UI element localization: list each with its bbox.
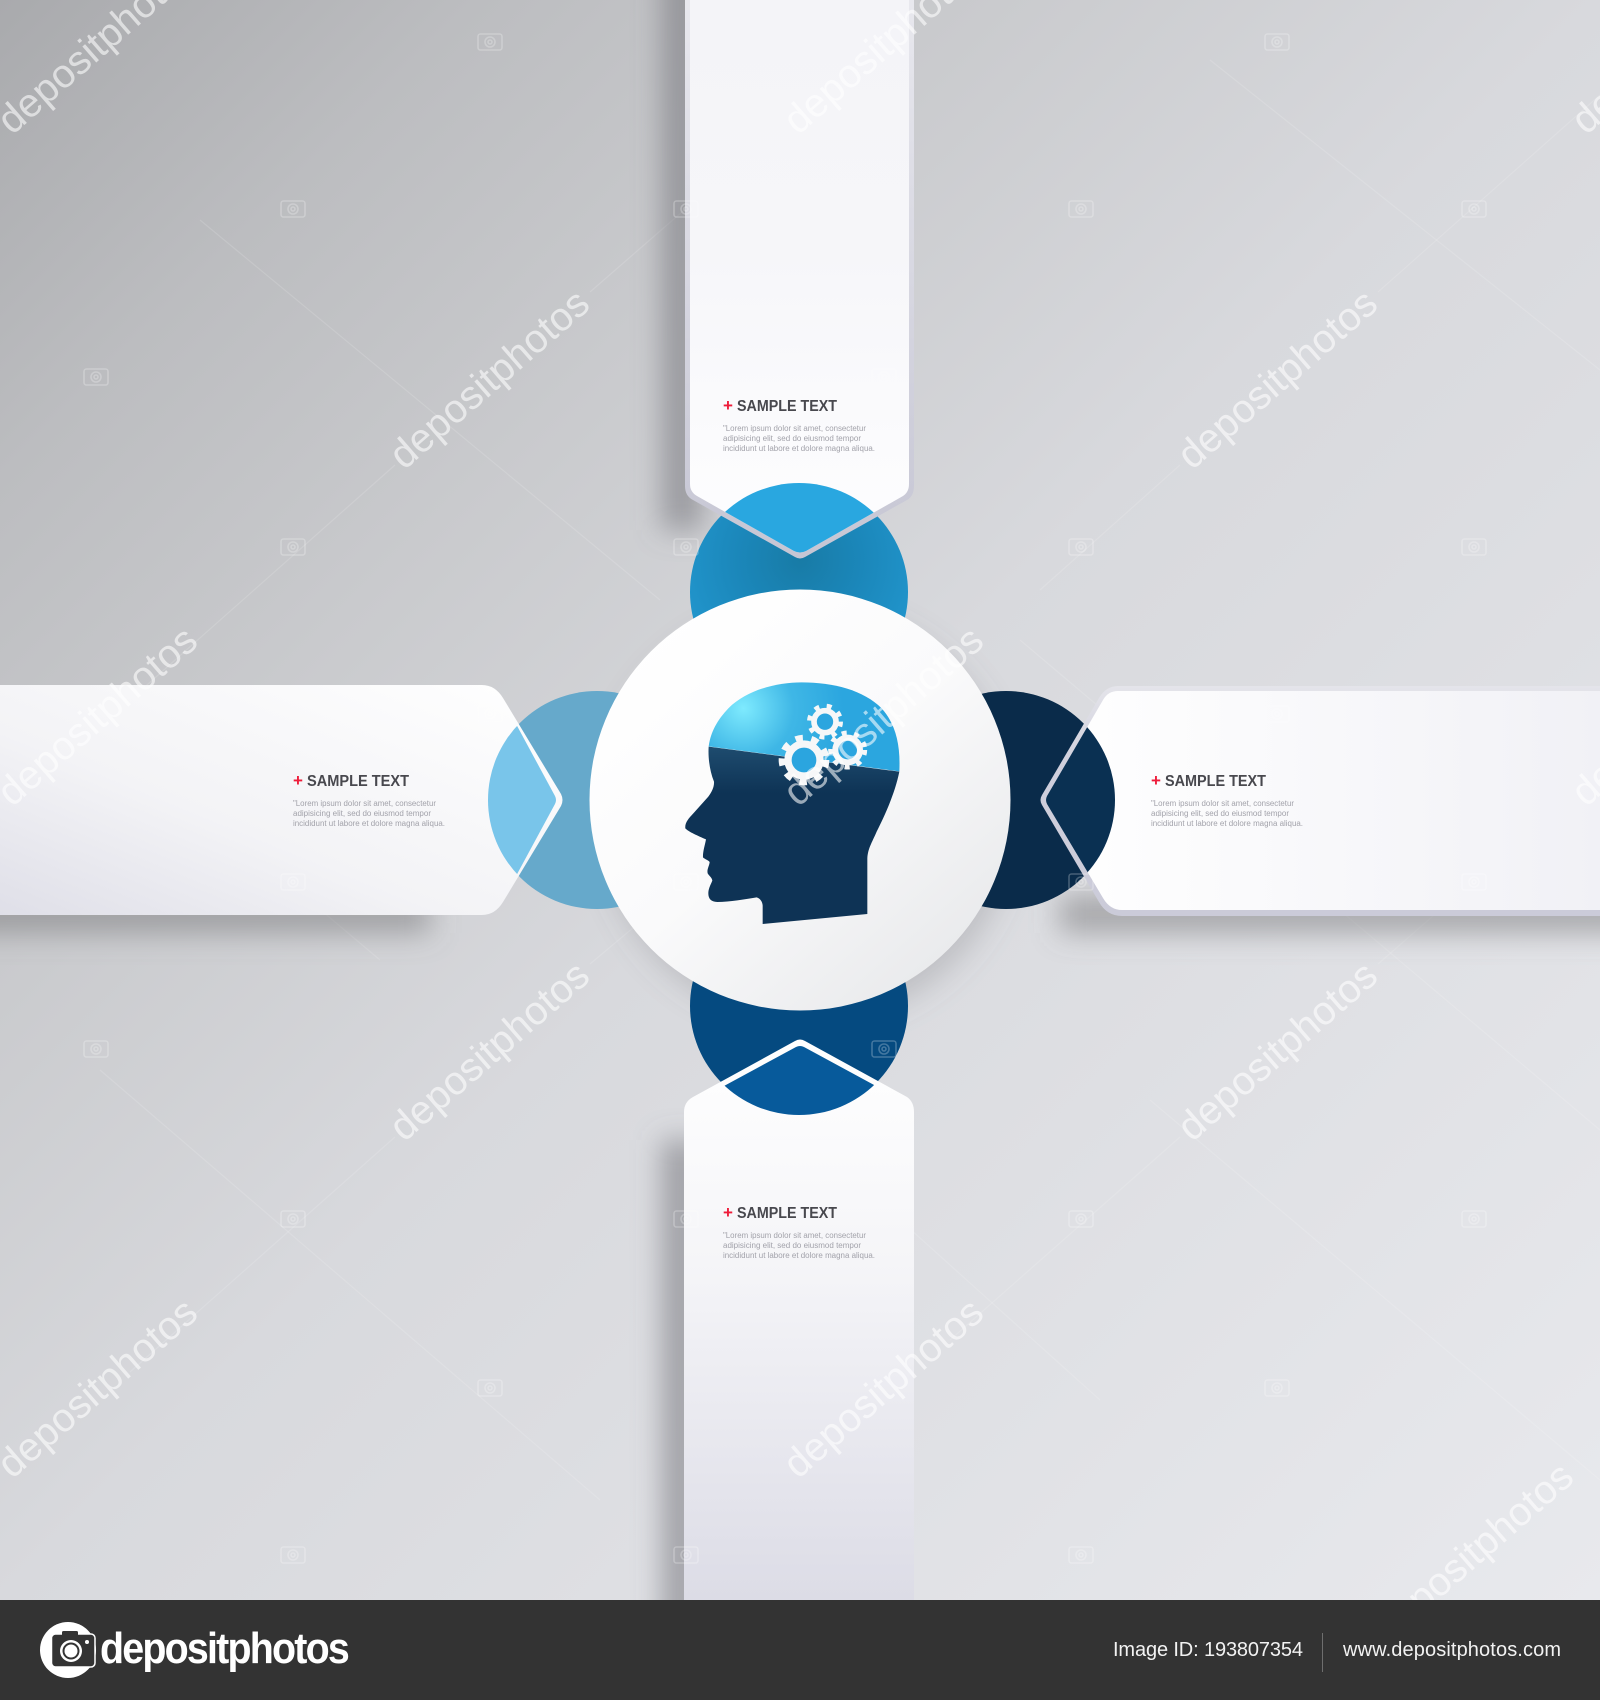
text block: left panel: incididunt ut labore et dolore magna aliqua. [293,819,445,828]
head silhouette [685,747,899,924]
footer logo icon: camera in circle [40,1622,96,1678]
text block: right panel: incididunt ut labore et dolore magna aliqua. [1151,819,1303,828]
center circle [590,590,1010,1010]
panel: bottom [684,1040,914,1600]
watermark: depositphotos text: depositphotos [1169,281,1386,478]
text block: right panel: adipisicing elit, sed do eiusmod tempor [1151,809,1289,818]
shadow: bottom panel [662,1140,702,1660]
text block: bottom panel [723,1203,875,1260]
watermark: camera icons [84,34,1486,1563]
watermark: depositphotos text: depositphotos [381,281,598,478]
left circle segment inside panel [488,726,556,874]
circle: bottom, deep blue base [690,897,908,1115]
bottom circle segment inside panel [724,1046,874,1115]
top circle segment inside panel [725,483,874,552]
panel: right [1040,686,1600,916]
shadow: left panel [0,895,430,933]
text block: right panel: + [1151,771,1161,790]
footer divider [1322,1633,1323,1672]
circle: right, navy base [897,691,1115,909]
text block: top panel: incididunt ut labore et dolore magna aliqua. [723,444,875,453]
text block: left panel [293,771,445,828]
text block: top panel: "Lorem ipsum dolor sit amet, consectetur [723,424,866,433]
text block: top panel: + [723,396,733,415]
gear large [782,738,826,782]
panel: top [685,0,914,558]
circle: top, dark blue base [690,483,908,701]
text block: bottom panel: incididunt ut labore et dolore magna aliqua. [723,1251,875,1260]
watermark: depositphotos text: depositphotos [1365,1454,1582,1651]
text block: left panel: SAMPLE TEXT [307,773,409,790]
right circle segment inside panel [1046,727,1115,872]
circle: left, muted blue base [488,691,706,909]
gear small right [831,733,865,767]
text block: bottom panel: "Lorem ipsum dolor sit amet, consectetur [723,1231,866,1240]
text block: bottom panel: + [723,1203,733,1222]
text block: right panel [1151,771,1303,828]
icon: head with gears [685,682,900,924]
text block: top panel: SAMPLE TEXT [737,398,837,415]
shadow: right panel [1060,895,1600,933]
gear small top [809,706,841,737]
text block: bottom panel: adipisicing elit, sed do eiusmod tempor [723,1241,861,1250]
watermark: depositphotos text: depositphotos [381,953,598,1150]
footer website: www.depositphotos.com [1342,1639,1561,1661]
footer image id: Image ID: 193807354 [1113,1639,1303,1661]
footer logo wordmark: depositphotos [100,1624,348,1673]
footer bar [0,1600,1600,1700]
text block: right panel: "Lorem ipsum dolor sit amet, consectetur [1151,799,1294,808]
panel: left [0,685,562,915]
text block: bottom panel: SAMPLE TEXT [737,1205,837,1222]
text block: top panel [723,396,875,453]
text block: right panel: SAMPLE TEXT [1165,773,1266,790]
watermark: depositphotos text: depositphotos [775,1290,992,1487]
text block: left panel: "Lorem ipsum dolor sit amet, consectetur [293,799,436,808]
text block: left panel: + [293,771,303,790]
text block: top panel: adipisicing elit, sed do eiusmod tempor [723,434,861,443]
shadow: top panel [662,0,702,530]
center circle shadow [600,608,1016,1024]
watermark: depositphotos text: depositphotos [1169,953,1386,1150]
brain cap [709,682,900,771]
watermark: depositphotos text: depositphotos [775,618,992,815]
text block: left panel: adipisicing elit, sed do eiusmod tempor [293,809,431,818]
